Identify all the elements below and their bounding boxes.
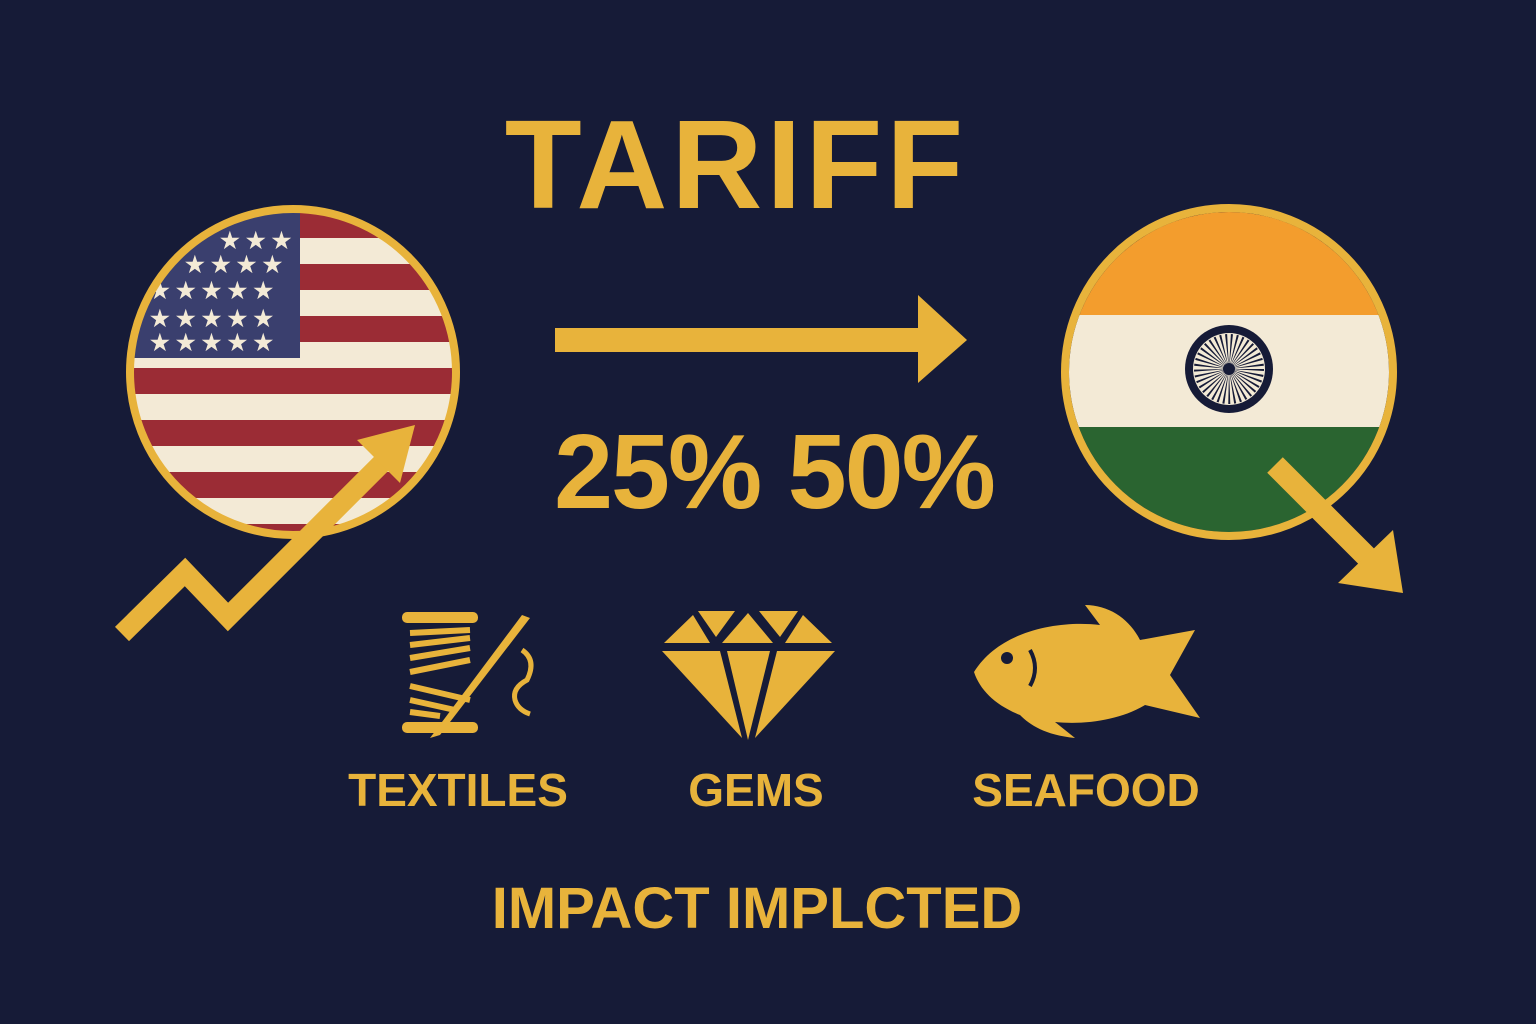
arrow: tariff direction — [555, 295, 967, 383]
arrow: down trend — [1275, 465, 1403, 593]
arrow: up trend — [122, 425, 415, 634]
icon: US flag circle: ★ ★ ★ ★ ★ — [150, 278, 273, 303]
icon: US flag circle: ★ ★ ★ ★ ★ — [150, 306, 273, 331]
title: TARIFF — [505, 94, 967, 235]
footer text: IMPACT IMPLCTED — [492, 876, 1022, 941]
icon: US flag circle — [120, 200, 470, 550]
icon: seafood — [974, 605, 1200, 738]
label: seafood: SEAFOOD — [972, 764, 1200, 816]
icon: US flag circle: ★ ★ ★ ★ — [185, 252, 283, 277]
label: gems: GEMS — [688, 764, 824, 816]
icon: US flag circle: ★ ★ ★ ★ ★ — [150, 330, 273, 355]
label: textiles: TEXTILES — [348, 764, 568, 816]
icon: India flag circle — [1060, 200, 1400, 547]
icon: gems — [662, 611, 835, 740]
text: tariff rates: 25% 50% — [554, 413, 994, 531]
icon: US flag circle: ★ ★ ★ — [220, 228, 292, 253]
icon: textiles — [402, 612, 531, 738]
